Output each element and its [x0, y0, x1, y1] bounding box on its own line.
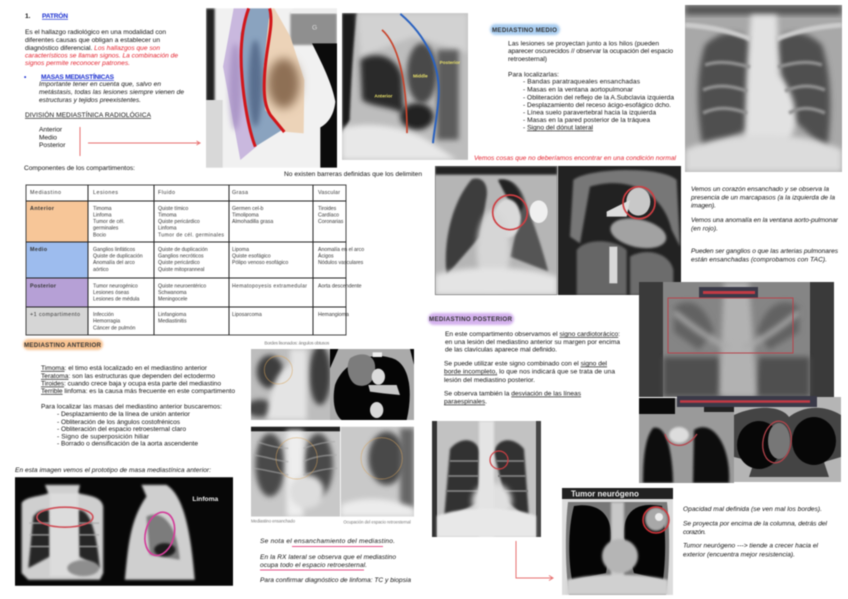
text: las cuatro T [41, 365, 235, 395]
arrow: hacia tumor neurógeno [516, 541, 553, 580]
table grid [26, 185, 346, 335]
row: posterior: Lesiones óseas [93, 290, 129, 296]
row: más de un compartimento: Cáncer de pulmón [93, 326, 136, 332]
row: posterior: Lesiones de médula [93, 296, 140, 302]
section: mediastino anterior [15, 339, 235, 474]
text: notas linfoma: En la RX lateral se observa que el mediastino [260, 554, 396, 561]
text: signo del borde incompleto: lesión del mediastino posterior. [444, 377, 535, 384]
badge: mediastino medio: MEDIASTINO MEDIO [492, 27, 557, 34]
row: anterior: germinales [93, 226, 119, 232]
text: corazón ensanchado: están ensanchadas (comprobamos con TAC). [691, 256, 827, 264]
text: opacidad mal definida [683, 506, 828, 558]
heading: división mediastínica: DIVISIÓN MEDIASTÍNICA RADIOLÓGICA [25, 110, 152, 119]
text: signo cervicotorácico: de las clavículas aparece mal definido. [445, 346, 557, 354]
row: medio: aórtico [93, 267, 109, 273]
list: compartimentos: Medio [39, 134, 57, 142]
badge: mediastino anterior [23, 339, 103, 350]
row: posterior: Schwanoma [158, 290, 187, 296]
text: signos de masa anterior: - Signo de superposición hiliar [57, 434, 150, 440]
text: signos de masa anterior: - Obliteración del espacio retroesternal claro [57, 426, 186, 433]
row: más de un compartimento: Hemorragia [93, 318, 120, 324]
table header: Vascular [318, 190, 340, 196]
radiographs: linfoma [14, 476, 234, 587]
section: masas mediastínicas: Importante tener en cuenta que, salvo en [39, 81, 161, 88]
badge: mediastino anterior: MEDIASTINO ANTERIOR [24, 342, 102, 349]
text: signos de masa anterior: Para localizar las masas del mediastino anterior buscaremos: [41, 404, 222, 410]
section: masas mediastínicas: • [24, 74, 27, 81]
CT: tumor neurógeno [561, 487, 674, 596]
text: las cuatro T: Tiroides: cuando crece baja y ocupa esta parte del mediastino [41, 380, 221, 388]
heading: componentes: Componentes de los compartimentos: [24, 165, 135, 172]
row: medio: Nódulos vasculares [318, 260, 364, 266]
text: proyección: aparecer oscurecidos // observar la ocupación del espacio [508, 48, 673, 55]
text: corazón ensanchado [690, 186, 839, 264]
text: opacidad mal definida: exterior (encuentra mejor resistencia). [683, 552, 795, 558]
text: signo del borde incompleto: borde incompleto, lo que nos indicará que se trata de una [444, 368, 615, 376]
arrow: compartimentos a radiografía [80, 127, 200, 156]
list: para localizarlas: - Signo del dónut lateral [523, 124, 594, 132]
row: anterior: Quiste tímico [158, 206, 188, 212]
text: opacidad mal definida: Se proyecta por encima de la columna, detrás del [683, 520, 828, 528]
row: anterior: Germen cel-b [232, 206, 264, 212]
MRI: corazón [557, 165, 682, 296]
row: anterior: Almohadilla grasa [232, 219, 273, 225]
badge: mediastino posterior: MEDIASTINO POSTERIOR [429, 316, 513, 323]
MRI: axial [733, 396, 842, 482]
section: mediastino medio [474, 24, 677, 162]
table: componentes de los compartimentos [26, 185, 364, 335]
band: etiqueta oscura [677, 396, 817, 407]
badge: mediastino medio [490, 24, 560, 35]
row: posterior: Quiste neuroentérico [158, 284, 206, 290]
row: medio: Quiste pericárdico [158, 260, 200, 266]
text: notas linfoma: ocupa todo el espacio retroesternal. [260, 562, 367, 569]
caption: bordes lobulados: Bordes lisonados: ángulos obtusos [264, 340, 330, 345]
captions: radiografías: Mediastino ensanchado [251, 518, 296, 523]
caption: sin barreras: No existen barreras definidas que los delimiten [284, 171, 422, 178]
row: anterior: Timoma [158, 212, 177, 218]
text: signo del borde incompleto: Se puede utilizar este signo combinado con el signo del [444, 360, 608, 368]
row: medio: Quiste de duplicación [93, 254, 143, 260]
table header: Grasa [232, 190, 248, 196]
text: proyección [508, 40, 673, 63]
row: anterior: Cardíaco [318, 212, 339, 218]
list: para localizarlas: Para localizarlas: [508, 72, 559, 78]
row: anterior: Bocio [93, 232, 106, 238]
section: patrón [25, 11, 178, 67]
table header: Mediastino [30, 190, 61, 196]
radiograph: marcapasos [434, 165, 558, 296]
radiograph: lateral with colored compartments: G [312, 24, 317, 31]
row: medio: Lipoma [232, 247, 249, 253]
section: patrón: diagnóstico diferencial. Los hallazgos que son [25, 45, 160, 52]
list: para localizarlas: - Obliteración del reflejo de la A.Subclavia izquierda [523, 94, 674, 102]
row: medio: Anomalía del arco [93, 260, 135, 266]
radiograph: mediastino ensanchado [250, 426, 341, 517]
row: anterior: Linfoma [158, 226, 177, 232]
section: masas mediastínicas: estructuras y tejidos preexistentes. [39, 97, 141, 104]
row: anterior: Timoma [93, 206, 112, 212]
row: anterior: Quiste pericárdico [158, 219, 200, 225]
row: anterior: Tumor de cél. germinales [158, 232, 224, 238]
row: más de un compartimento [30, 312, 349, 332]
radiograph: espacio retroesternal [340, 426, 415, 517]
text: signo cervicotorácico [445, 331, 620, 354]
text: corazón ensanchado: imagen). [691, 202, 716, 210]
text: las cuatro T: Teratoma: son las estructuras que dependen del ectodermo [41, 373, 215, 380]
text: proyección: Las lesiones se proyectan junto a los hilos (pueden [508, 40, 659, 48]
captions: radiografías: Ocupación del espacio retroesternal [343, 520, 411, 525]
radiograph: tórax frontal superior [684, 4, 843, 172]
row: más de un compartimento: +1 compartimento [30, 312, 80, 318]
row: más de un compartimento: Liposarcoma [232, 312, 262, 318]
text: notas linfoma [260, 538, 411, 584]
row: medio [30, 247, 364, 273]
row: posterior: Tumor neurogénico [93, 284, 138, 290]
text: corazón ensanchado: (en rojo). [691, 226, 718, 232]
row: medio: Medio [30, 247, 48, 253]
radiograph: borde incompleto [431, 420, 542, 538]
section: patrón: diferentes causas que obligan a establecer un [25, 37, 160, 44]
badge: mediastino posterior [428, 313, 514, 325]
row: posterior: Posterior [30, 284, 57, 290]
text: las cuatro T: Terrible linfoma: es la causa más frecuente en este compartimento [41, 388, 235, 395]
text: signos de masa anterior [41, 404, 222, 448]
row: medio: Quiste de duplicación [158, 247, 208, 253]
text: corazón ensanchado: Vemos un corazón ensanchado y se observa la [691, 186, 829, 193]
row: anterior [30, 206, 344, 238]
list: compartimentos: Anterior [39, 126, 63, 134]
text: corazón ensanchado: presencia de un marcapasos (a la izquierda de la [690, 194, 835, 202]
row: medio: Quiste esofágico [232, 254, 271, 260]
radiograph: lateral with compartment lines: Posterior [440, 60, 460, 65]
text: opacidad mal definida: corazón. [683, 529, 706, 536]
row: medio: Ácigos [318, 252, 334, 260]
radiograph: lateral with compartment lines: Middle [413, 74, 428, 79]
radiograph: masa frontal [250, 348, 331, 420]
row: anterior: Anterior [30, 206, 55, 212]
list: para localizarlas: - Línea suelo paravertebral hacia la izquierda [523, 110, 656, 116]
row: medio: Quiste mitopranneal [158, 267, 204, 273]
section: masas mediastínicas: metástasis, todas las lesiones siempre vienen de [39, 89, 184, 96]
section: patrón: 1. [25, 13, 31, 20]
row: posterior [30, 284, 362, 302]
list: para localizarlas: - Masas en la pared posterior de la tráquea [523, 117, 650, 124]
row: anterior: Tiroides [318, 206, 337, 212]
text: signo del borde incompleto [444, 360, 615, 384]
table header: Lesiones [93, 190, 118, 196]
text: signos de masa anterior: - Borrado o densificación de la aorta ascendente [57, 440, 198, 448]
list: para localizarlas [508, 72, 674, 132]
text: opacidad mal definida: Opacidad mal definida (se ven mal los bordes). [683, 506, 822, 513]
text: signo cervicotorácico: en una lesión del mediastino anterior su margen por encima [445, 339, 620, 346]
radiograph group: mediastino ensanchado [246, 340, 414, 525]
table header: Fluido [158, 190, 175, 196]
text: prototipo: En esta imagen vemos el prototipo de masa mediastínica anterior: [15, 467, 211, 474]
text: corazón ensanchado: Vemos una anomalía en la ventana aorto-pulmonar [691, 217, 839, 224]
text: líneas paraespinales: Se observa también la desviación de las líneas [444, 390, 582, 398]
row: más de un compartimento: Mediastinitis [158, 318, 187, 324]
row: posterior: Aorta descendente [318, 284, 362, 290]
row: medio: Pólipo venoso esofágico [232, 260, 288, 266]
radiographs: linfoma: Linfoma [192, 496, 219, 503]
radiograph: lateral with colored compartments [205, 7, 338, 168]
text: signos de masa anterior: - Desplazamiento de la línea de unión anterior [57, 411, 191, 418]
section: patrón: característicos se llaman signos. La combinación de [25, 52, 178, 60]
list: compartimentos: Posterior [39, 142, 66, 149]
section: mediastino posterior [428, 313, 620, 406]
list: para localizarlas: - Desplazamiento del receso ácigo-esofágico dcho. [523, 102, 671, 109]
row: medio: Ganglios necróticos [158, 254, 204, 260]
row: anterior: Linfoma [93, 212, 112, 218]
CT: masa mediastínica [329, 348, 415, 421]
text: nota roja: Vemos cosas que no deberíamos encontrar en una condición normal [474, 155, 677, 162]
row: posterior: Hematopoyesis extramedular [232, 284, 307, 290]
section: patrón: PATRÓN [42, 11, 68, 20]
section: masas mediastínicas [24, 72, 184, 104]
captions: radiografías [251, 518, 411, 525]
row: más de un compartimento: Infección [93, 312, 114, 318]
row: posterior: Meningocele [158, 296, 188, 302]
radiograph: tórax superior con etiqueta [638, 281, 835, 398]
row: más de un compartimento: Hemangioma [318, 312, 349, 318]
list: compartimentos [39, 126, 66, 149]
row: medio: Anomalía en el arco [318, 247, 364, 253]
text: líneas paraespinales [444, 390, 582, 406]
section: masas mediastínicas: MASAS MEDIASTÍNICAS [41, 72, 115, 81]
text: signos de masa anterior: - Obliteración de los ángulos costofrénicos [57, 419, 181, 426]
text: corazón ensanchado: Pueden ser ganglios o que las arterias pulmonares [691, 248, 839, 255]
list: para localizarlas: - Bandas paratraqueales ensanchadas [523, 78, 641, 86]
list: para localizarlas: - Masas en la ventana aortopulmonar [523, 86, 634, 94]
text: líneas paraespinales: paraespinales. [444, 398, 487, 406]
text: opacidad mal definida: Tumor neurógeno ---> tiende a crecer hacia el [683, 542, 819, 550]
row: anterior: Coronarias [318, 219, 344, 225]
section: patrón: signos permite reconocer patrones. [25, 60, 130, 67]
table header [30, 190, 340, 196]
radiograph pair: ventana aortopulmonar [435, 166, 681, 295]
text: notas linfoma: Para confirmar diagnóstico de linfoma: TC y biopsia [260, 577, 411, 584]
CT: tumor neurógeno: Tumor neurógeno [571, 490, 639, 498]
radiograph: lateral with compartment lines: Anterior [374, 93, 393, 98]
text: notas linfoma: Se nota el ensanchamiento del mediastino. [260, 538, 395, 545]
text: proyección: retroesternal) [508, 56, 547, 63]
row: anterior: Timolipoma [232, 212, 259, 218]
radiograph: lateral with compartment lines [341, 12, 468, 160]
row: medio: Ganglios linfáticos [93, 247, 136, 253]
text: signo cervicotorácico: En este compartimento observamos el signo cardiotorácico: [445, 331, 620, 338]
section: patrón: Es el hallazgo radiológico en una modalidad con [25, 29, 166, 36]
MRI: coronal [638, 397, 735, 484]
row: anterior: Tumor de cél. [93, 219, 125, 225]
row: más de un compartimento: Linfangioma [158, 312, 186, 318]
table row fills [26, 201, 88, 335]
text: las cuatro T: Timoma: el timo está localizado en el mediastino anterior [41, 365, 208, 372]
